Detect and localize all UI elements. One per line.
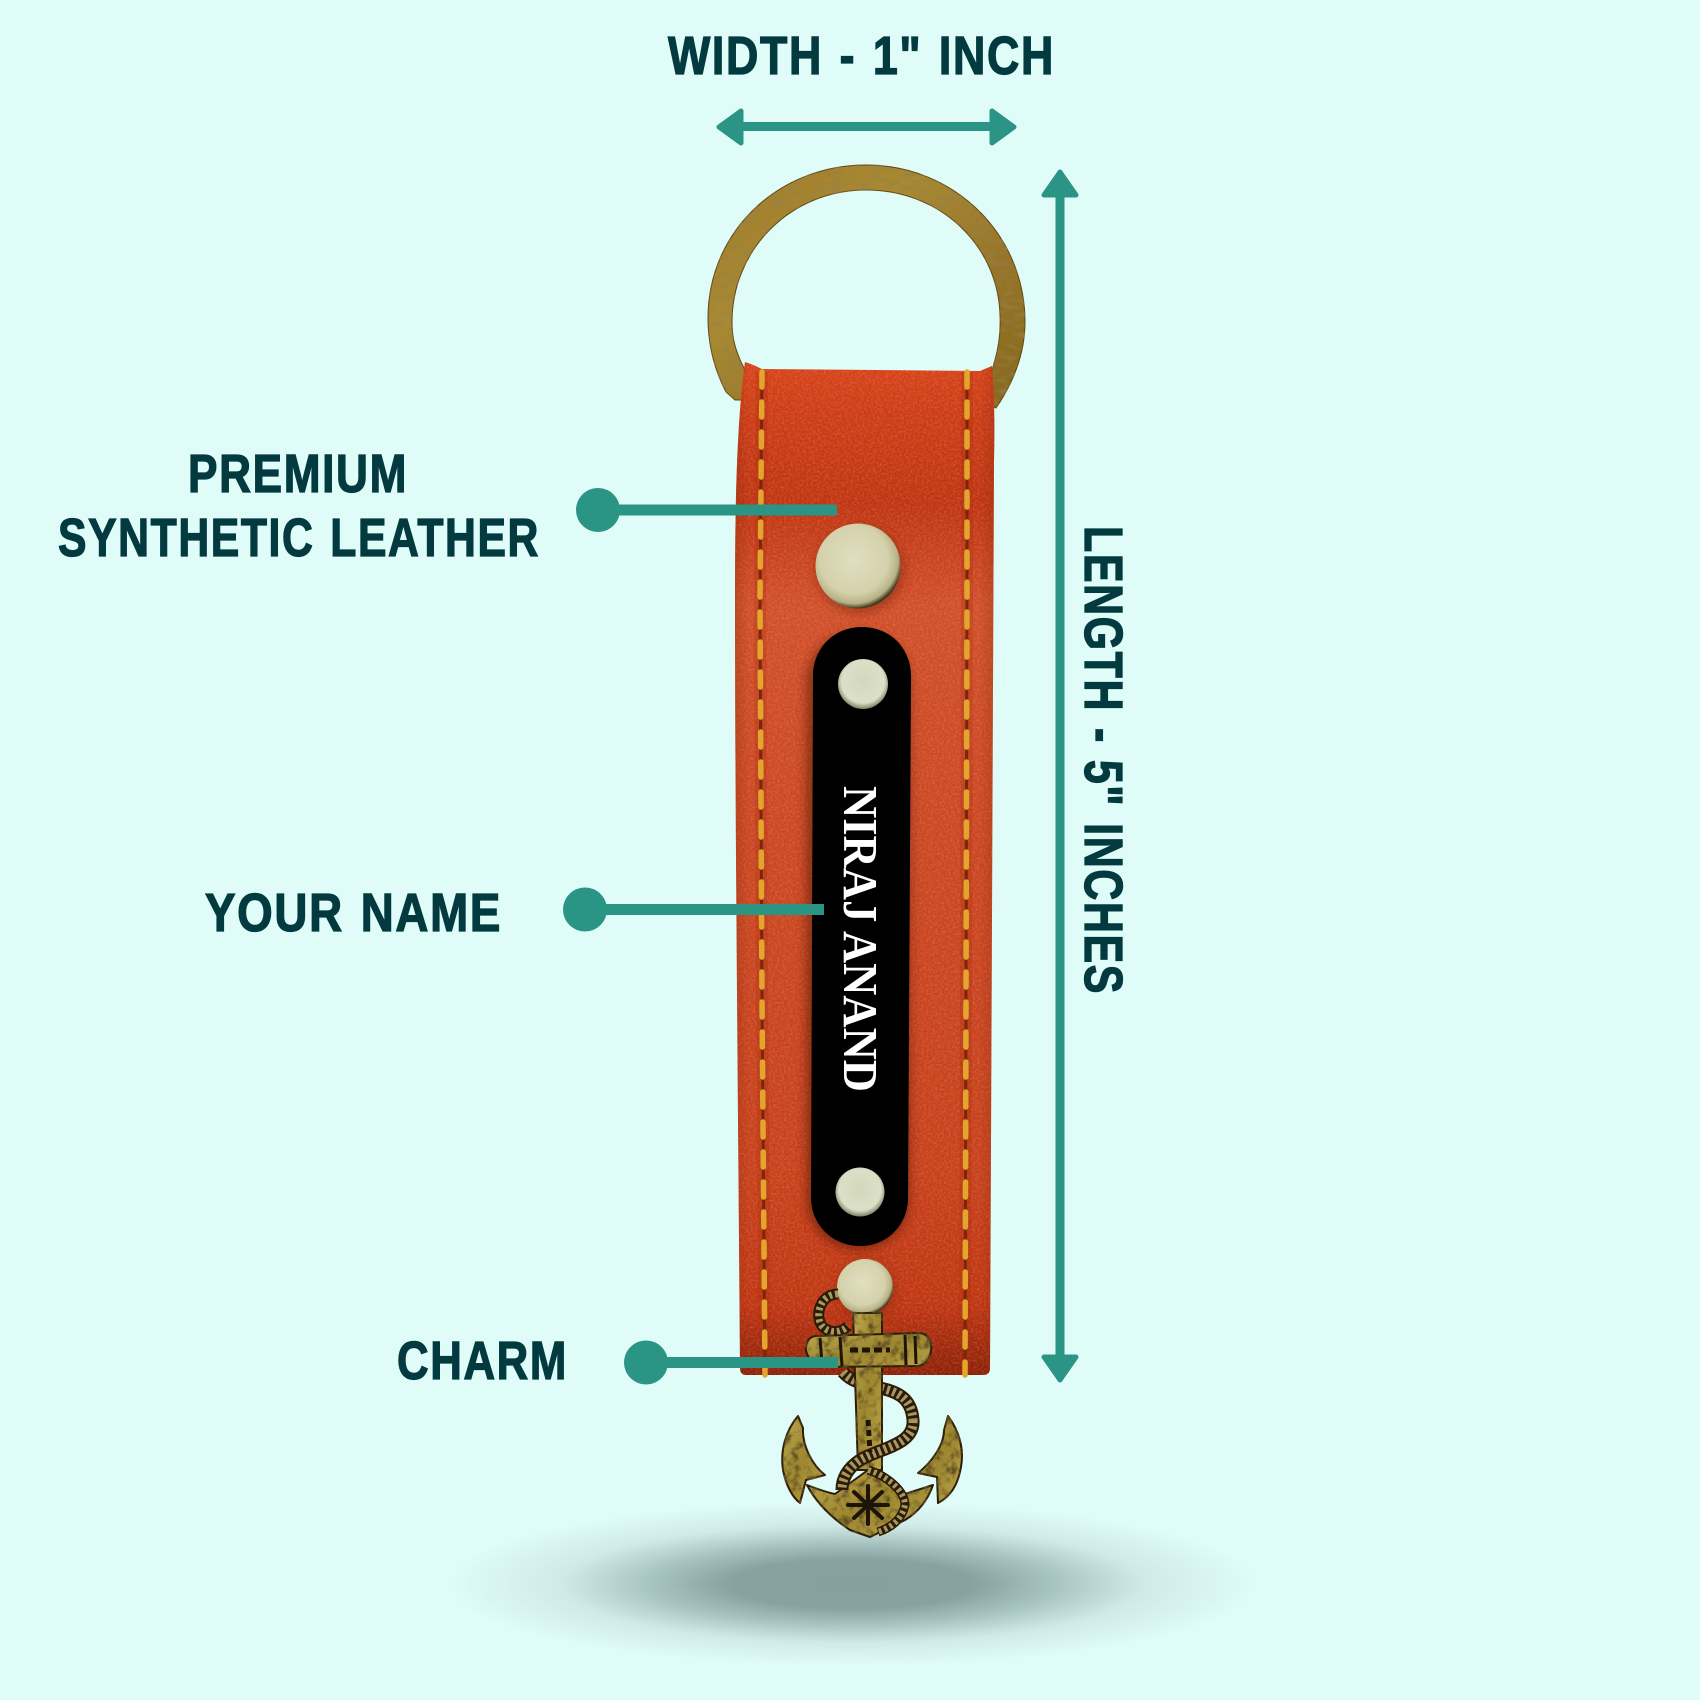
- crown ornament: [848, 1486, 888, 1524]
- callout text: YOUR NAME: [205, 883, 502, 943]
- rivet: top large: [816, 524, 904, 614]
- shank detail: [868, 1420, 870, 1452]
- arrow: length dimension: [1044, 172, 1076, 1380]
- rope front: [842, 1420, 913, 1490]
- leader line: [563, 888, 824, 932]
- anchor metal: [782, 1313, 962, 1537]
- floor shadow: [447, 1502, 1257, 1666]
- callout: your name: [205, 883, 824, 943]
- anchor charm: [782, 1294, 962, 1537]
- shank: [853, 1313, 882, 1470]
- callout text: SYNTHETIC LEATHER: [58, 508, 540, 568]
- callout text: PREMIUM: [188, 444, 408, 504]
- rope behind shank: [843, 1372, 913, 1420]
- stock detail: [820, 1335, 916, 1366]
- left fluke: [782, 1416, 825, 1503]
- right fluke: [918, 1416, 962, 1503]
- callout: charm: [397, 1331, 838, 1391]
- stitching: [760, 372, 967, 1375]
- width heading: WIDTH - 1" INCH: [668, 26, 1055, 86]
- plate rivet: upper: [838, 659, 888, 709]
- leader line: [576, 488, 837, 532]
- plate rivet: lower: [836, 1168, 884, 1216]
- callout text: [58, 444, 540, 568]
- callout: premium synthetic leather: [58, 444, 837, 568]
- engraved name: NIRAJ ANAND: [833, 786, 888, 1092]
- leather strap: [730, 360, 1000, 1380]
- callout text: CHARM: [397, 1331, 568, 1391]
- stock: [806, 1333, 931, 1367]
- leader line: [624, 1340, 838, 1384]
- rope loop: [819, 1294, 848, 1332]
- arrow: width dimension: [719, 111, 1014, 143]
- rope over crown: [868, 1470, 905, 1532]
- length heading: LENGTH - 5" INCHES: [1073, 526, 1133, 995]
- rivet: bottom: [837, 1259, 895, 1319]
- brass D-ring: [708, 165, 1025, 408]
- name plate: [806, 627, 911, 1250]
- crown: [807, 1470, 933, 1537]
- infographic canvas: [58, 36, 1206, 1656]
- keychain product: [708, 165, 1025, 1537]
